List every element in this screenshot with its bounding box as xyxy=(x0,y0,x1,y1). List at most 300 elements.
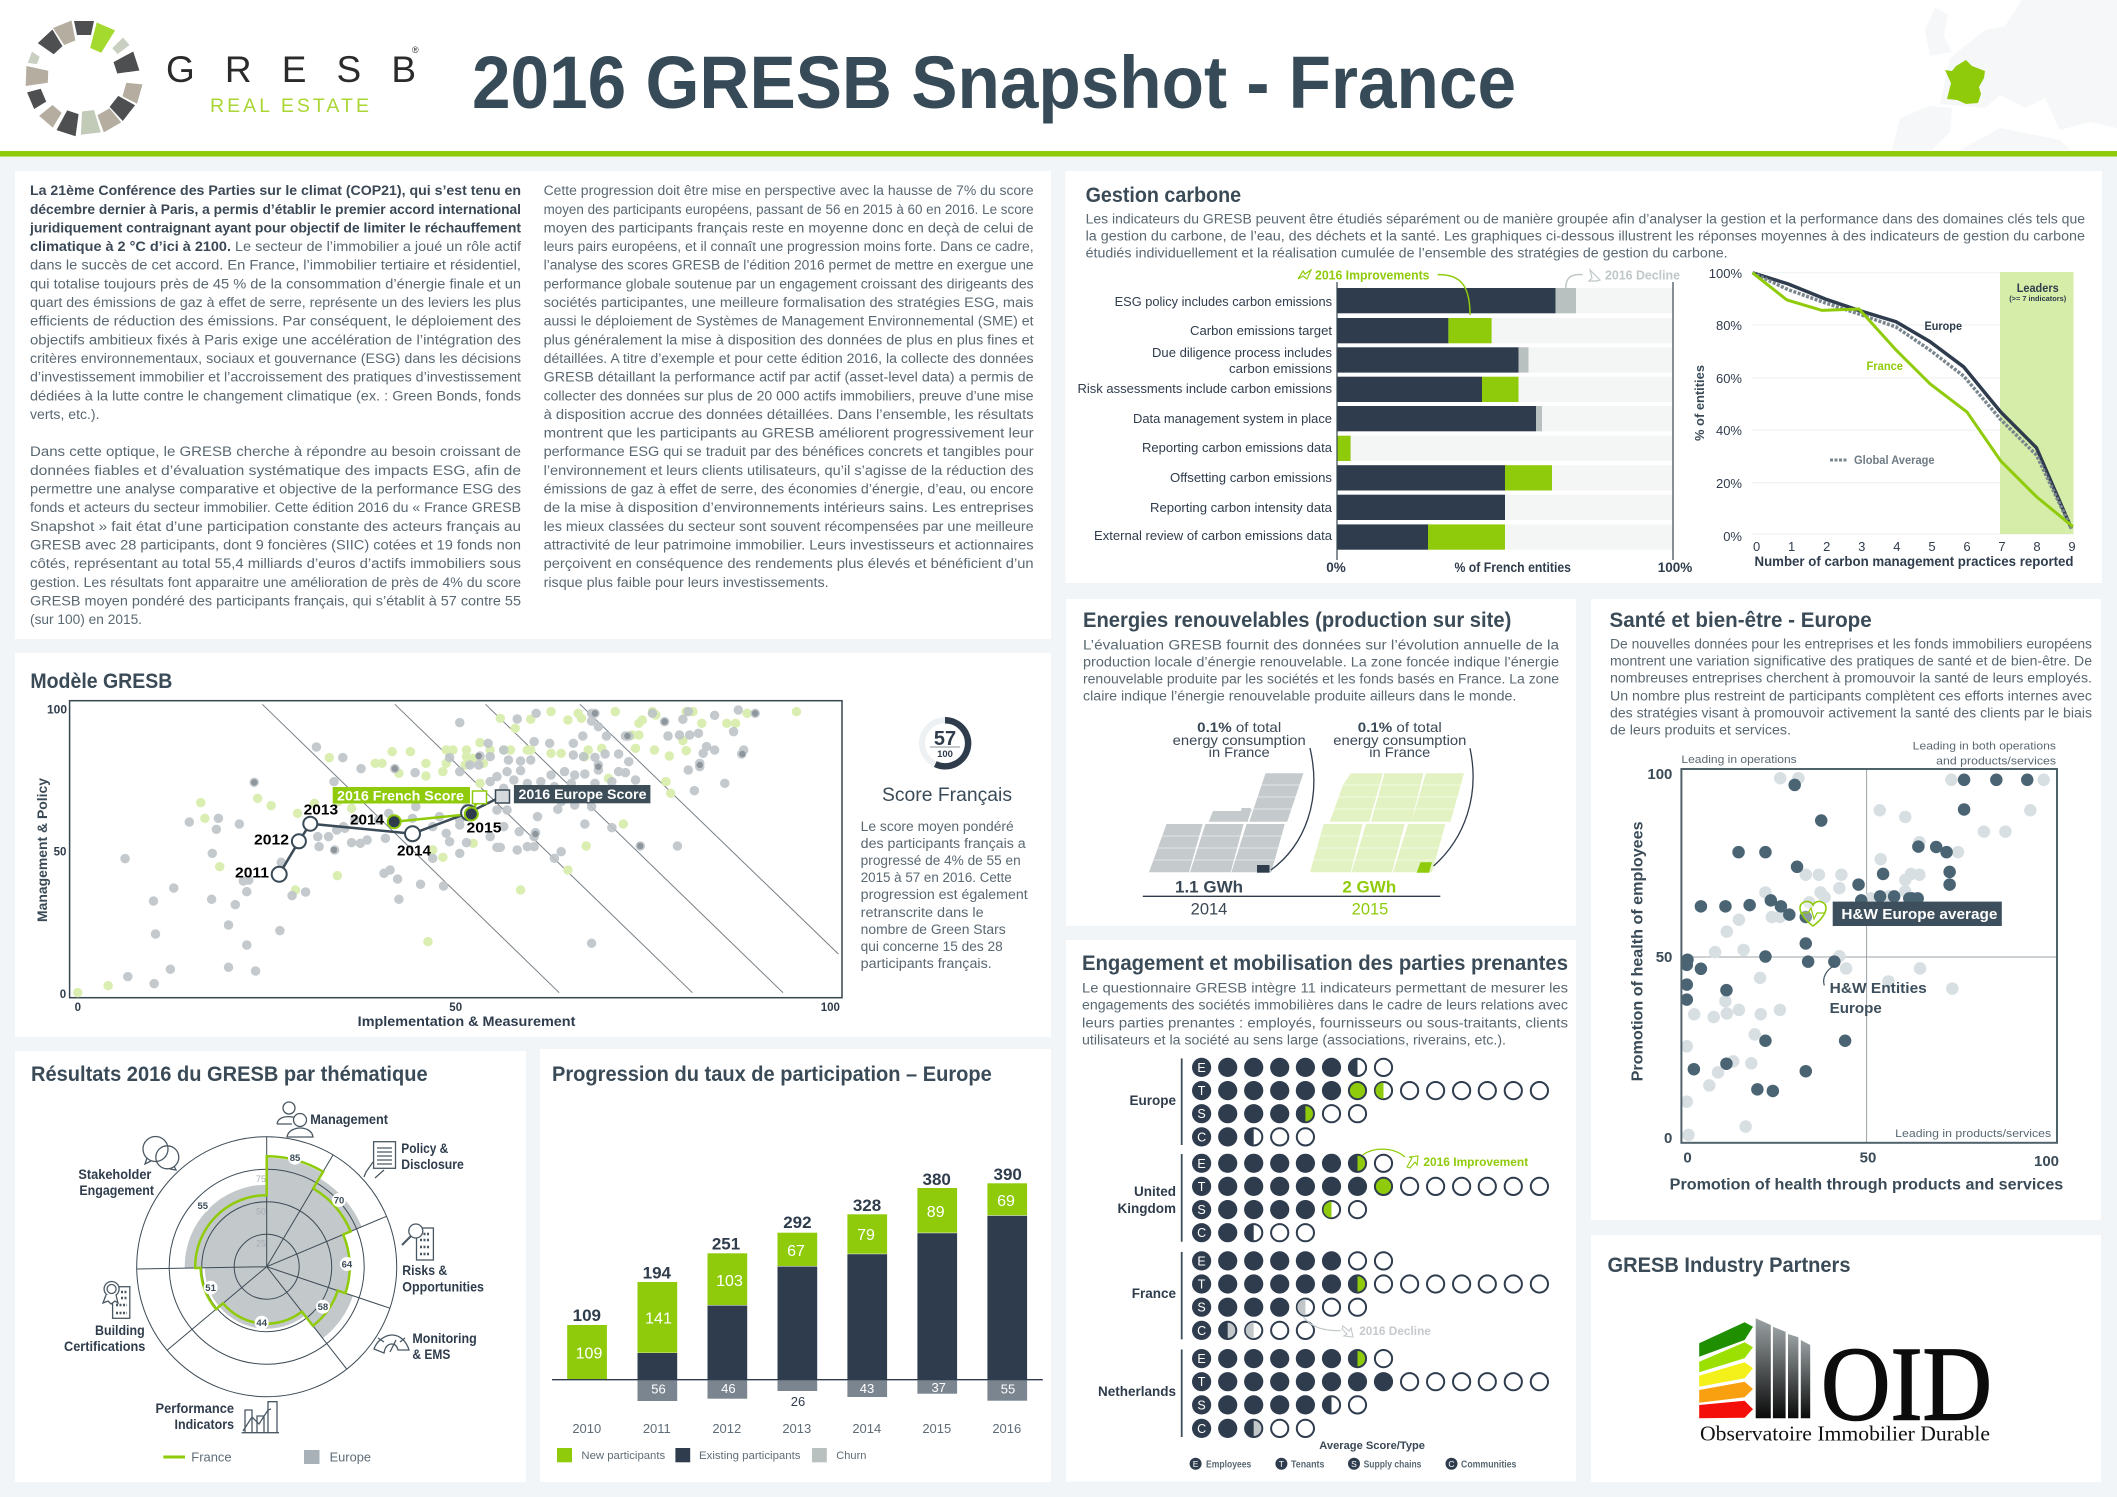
icon: stakeholder speech bubbles xyxy=(143,1136,179,1170)
y ticks xyxy=(1647,766,1672,1147)
dot matrix: Europe xyxy=(1129,1058,1548,1146)
text block: claire indique l’énergie renouvelable produite ailleurs dans le monde. xyxy=(1083,688,1516,704)
legend: average score type: C xyxy=(1448,1459,1455,1469)
text block: right column: moyen des participants français reste en moyenne donc en deçà de celui de xyxy=(544,220,1034,235)
text block: left column: permettre une analyse comparative et objective de la performance ESG des xyxy=(30,482,521,496)
heading: Résultats 2016 du GRESB par thématique xyxy=(31,1063,428,1086)
y tick labels: 100% xyxy=(1709,266,1742,281)
x tick labels: 9 xyxy=(2068,539,2076,554)
text block: left column: critères environnementaux, sociaux et gouvernance (ESG) dans les décisions xyxy=(30,351,521,366)
caption: 2015 share: in France xyxy=(1369,744,1431,760)
text block: right column: Cette progression doit être mise en perspective avec la hausse de 7% du score xyxy=(544,183,1034,198)
y tick labels: 0% xyxy=(1723,529,1742,544)
axis labels: Risks & xyxy=(402,1263,448,1278)
label: Leaders: Leaders xyxy=(2017,281,2059,295)
text block: Un nombre plus restreint de participants complètent ces efforts internes avec xyxy=(1610,688,2092,704)
churn values: 37 xyxy=(931,1380,946,1395)
line: Europe xyxy=(1752,273,2072,529)
x axis title: Number of carbon management practices reported xyxy=(1754,554,2074,569)
x axis title: Promotion of health through products and services xyxy=(1670,1176,2063,1194)
ring scale labels: 75 xyxy=(256,1174,266,1184)
totals: 194 xyxy=(643,1263,672,1282)
text block: right column: l’environnement et leurs clients utilisateurs, qu’il s’agisse de la réduction des xyxy=(544,463,1034,478)
callout: 2016 Decline: 2016 Decline xyxy=(1605,268,1680,282)
label: H&W Entities Europe xyxy=(1824,966,1927,1017)
text block: left column: quart des émissions de gaz à effet de serre, représente un des leviers les plus xyxy=(30,295,521,310)
y tick labels: 60% xyxy=(1716,371,1742,386)
text block: left column: décembre dernier à Paris, a permis d’établir le premier accord international xyxy=(30,202,521,217)
x tick labels: 0 xyxy=(1753,539,1760,554)
line: Global average xyxy=(1752,273,2072,529)
axis labels: Disclosure xyxy=(401,1157,464,1172)
panel: GRESB Industry Partners xyxy=(1591,1235,2101,1482)
text block: right column: collecter des données sur plus de 20 000 actifs immobiliers, preuve d’une mise xyxy=(544,388,1034,403)
bar labels: Due diligence process includes xyxy=(1152,345,1332,360)
axis labels xyxy=(1326,560,1692,575)
legend: average score type: E xyxy=(1193,1459,1199,1469)
legend: average score type: Average Score/Type xyxy=(1319,1440,1425,1452)
dot matrix: France: T xyxy=(1198,1278,1206,1292)
x tick labels: 8 xyxy=(2033,539,2041,554)
axis labels: Stakeholder xyxy=(78,1167,152,1182)
axis labels: Management xyxy=(310,1112,388,1127)
text block: score explanation: 2015 à 57 en 2016. Cette xyxy=(861,870,1012,885)
y tick labels xyxy=(1709,266,1742,544)
value labels: 1.1 GWh xyxy=(1175,878,1243,896)
header band xyxy=(0,0,2117,156)
caption: 2014 share: in France xyxy=(1209,744,1270,760)
dot matrix: Netherlands: Netherlands xyxy=(1098,1384,1176,1399)
new participant values xyxy=(576,1193,1015,1362)
year labels: 2016 xyxy=(992,1421,1021,1436)
axis labels: & EMS xyxy=(412,1347,450,1362)
x ticks xyxy=(75,1002,840,1014)
text block: left column xyxy=(29,183,522,627)
bar labels: Carbon emissions target xyxy=(1190,323,1332,338)
y ticks: 50 xyxy=(54,846,66,858)
text block: score explanation: Le score moyen pondéré xyxy=(861,819,1014,834)
leaders band xyxy=(2000,272,2074,534)
panel: Santé et bien-être xyxy=(1591,599,2101,1220)
text block: left column: données fiables et d’évaluation systématique des impacts ESG, afin de xyxy=(30,463,521,478)
text block: score explanation: progression est également xyxy=(861,887,1028,902)
bar labels: ESG policy includes carbon emissions xyxy=(1115,294,1332,309)
callout: 2016 Improvements xyxy=(1298,268,1470,315)
new participant values: 109 xyxy=(576,1346,602,1362)
text block xyxy=(1082,980,1568,1048)
totals: 380 xyxy=(923,1170,951,1189)
text block: score explanation: participants français. xyxy=(861,956,992,971)
panel: Progression du taux de participation xyxy=(540,1049,1051,1482)
heading: Santé et bien-être - Europe xyxy=(1610,609,1872,632)
text block: renouvelable produite par les sociétés et les fonds basés en France. La zone xyxy=(1083,672,1559,686)
axis labels: 100% xyxy=(1658,560,1692,575)
icon: solar panels 2015 xyxy=(1305,748,1473,873)
bar labels: carbon emissions xyxy=(1229,361,1333,376)
x tick labels xyxy=(1753,539,2076,554)
dot matrix: Europe: S xyxy=(1197,1107,1206,1121)
year labels: 2015 xyxy=(466,820,502,836)
totals: 292 xyxy=(783,1213,812,1232)
line: French score trajectory xyxy=(394,797,479,822)
dot matrix: France: S xyxy=(1197,1301,1206,1315)
y ticks: 100 xyxy=(1647,766,1672,783)
x tick labels: 5 xyxy=(1928,539,1936,554)
year labels: 2013 xyxy=(304,802,338,818)
legend: average score type: Tenants xyxy=(1291,1458,1325,1470)
dot matrix: United Kingdom xyxy=(1118,1154,1548,1242)
text block: score explanation: des participants français a xyxy=(861,836,1026,851)
axis labels: Monitoring xyxy=(412,1331,477,1346)
text block: right column: émissions de gaz à effet de serre, des économies d’énergie, d’eau, ou encore xyxy=(544,482,1034,496)
y ticks: 0 xyxy=(1664,1130,1672,1147)
text block: left column: objectifs ambitieux fixés à Paris exige une accélération de l’intégration des xyxy=(30,332,521,347)
year labels: 2013 xyxy=(782,1421,811,1436)
new participant values: 89 xyxy=(927,1204,945,1221)
value labels: 2 GWh xyxy=(1342,878,1396,896)
text block: right column: aussi le déploiement de Systèmes de Management Environnemental (SME) et xyxy=(544,314,1034,329)
donut: score 57/100: 100 xyxy=(937,749,953,760)
y axis title: Management & Policy xyxy=(35,778,50,922)
line: France xyxy=(1752,273,2073,527)
dot matrix: Netherlands: E xyxy=(1197,1352,1206,1366)
bar labels: Risk assessments include carbon emissions xyxy=(1078,381,1332,396)
totals: 328 xyxy=(853,1196,881,1215)
value labels: 2015 xyxy=(1352,900,1388,918)
label: Leaders: (>= 7 indicators) xyxy=(2009,294,2067,303)
bar labels xyxy=(1078,294,1333,543)
label: France: France xyxy=(1866,359,1903,373)
churn values: 55 xyxy=(1001,1382,1015,1396)
label: H&W Europe average xyxy=(1833,902,2002,926)
legend: Europe xyxy=(330,1450,371,1464)
totals: 390 xyxy=(994,1165,1022,1184)
text block: left column: Dans cette optique, le GRESB cherche à répondre au besoin croissant de xyxy=(30,444,521,459)
callout: 2016 Improvement xyxy=(1363,1149,1528,1169)
y tick labels: 40% xyxy=(1716,423,1742,438)
text block: Les indicateurs du GRESB peuvent être étudiés séparément ou de manière groupée afin d’analyser la gestion et la performance dans des domaines clés tels que xyxy=(1086,212,2085,226)
axis labels: Building xyxy=(95,1323,145,1338)
dot matrix: France: C xyxy=(1197,1324,1206,1338)
text block: left column: climatique à 2 °C d’ici à 2100. Le secteur de l’immobilier a joué un rôle actif xyxy=(30,239,521,254)
icon: risks magnifier and building xyxy=(402,1224,433,1260)
label: H&W Europe average: H&W Europe average xyxy=(1841,906,1997,923)
text block xyxy=(1086,212,2085,260)
text block: left column: (sur 100) en 2015. xyxy=(30,612,142,627)
label: 2016 French Score: 2016 French Score xyxy=(337,788,464,804)
x ticks xyxy=(1683,1150,2059,1170)
caption: 2014 share: energy consumption xyxy=(1173,732,1306,748)
x tick labels: 3 xyxy=(1858,539,1865,554)
label: Global Average: Global Average xyxy=(1854,455,1935,467)
text block: Le questionnaire GRESB intègre 11 indicateurs permettant de mesurer les xyxy=(1082,980,1568,996)
x tick labels: 2 xyxy=(1823,539,1830,554)
text block: right column: performance ESG qui se traduit par des bénéfices concrets et tangibles pour xyxy=(544,444,1034,459)
text block: right column: à disposition accrue des données détaillées. Dans l’ensemble, les résultats xyxy=(544,407,1034,422)
icon: heart with pulse xyxy=(1800,901,1826,926)
dot matrix: Netherlands: T xyxy=(1198,1375,1206,1389)
logo: OID xyxy=(1699,1318,1992,1446)
text block xyxy=(1083,638,1560,704)
bar labels: Data management system in place xyxy=(1133,411,1332,426)
legend: average score type: S xyxy=(1351,1459,1357,1469)
text block: left column: verts, etc.). xyxy=(30,407,100,422)
label: 2016 Europe Score: 2016 Europe Score xyxy=(518,786,647,802)
scatter chart: GRESB model xyxy=(35,701,842,1029)
heading: Engagement et mobilisation des parties prenantes xyxy=(1082,952,1568,975)
new participant values: 103 xyxy=(716,1273,743,1290)
scatter chart: health and well-being xyxy=(1630,766,2063,1194)
axis labels: Opportunities xyxy=(402,1280,484,1294)
text block: montrent une variation significative des pratiques de santé et de bien-être. De xyxy=(1610,654,2092,668)
panel: Energies renouvelables xyxy=(1066,599,1576,926)
heading: Energies renouvelables (production sur site) xyxy=(1083,609,1511,632)
text block: right column: les mieux classées du secteur sont souvent récompensées par une meilleure xyxy=(544,519,1034,534)
dot matrix: France: France xyxy=(1132,1286,1176,1301)
legend: average score type: Employees xyxy=(1206,1458,1251,1470)
value labels: 58 xyxy=(318,1302,328,1313)
axis labels: Engagement xyxy=(79,1183,154,1198)
text block: left column: La 21ème Conférence des Parties sur le climat (COP21), qui s’est tenu en xyxy=(30,183,521,198)
y ticks: 100 xyxy=(47,704,67,716)
callout: 2016 Decline xyxy=(1303,1317,1431,1338)
ring scale labels: 25 xyxy=(256,1238,266,1248)
bar labels: Reporting carbon intensity data xyxy=(1150,500,1333,515)
callout: 2016 Improvements: 2016 Improvements xyxy=(1315,268,1430,282)
text block: score explanation xyxy=(861,819,1028,971)
quadrant labels xyxy=(1681,740,2057,1140)
totals: 251 xyxy=(712,1234,740,1253)
line chart: number of carbon practices xyxy=(1693,266,2076,569)
dot matrix: United Kingdom: United xyxy=(1134,1184,1176,1199)
value labels xyxy=(1143,878,1440,918)
text block: left column: juridiquement contraignant ayant pour objectif de limiter le réchauffement xyxy=(29,220,522,235)
new participant values: 79 xyxy=(857,1227,875,1244)
text block: left column: GRESB avec 28 participants, dont 9 foncières (SIIC) cotées et 19 fonds non xyxy=(30,537,521,552)
logo: OID: OID xyxy=(1821,1326,1992,1442)
y ticks xyxy=(47,704,67,1001)
logo wordmark: ® xyxy=(412,45,419,55)
text block: left column: GRESB moyen pondéré des participants français, qui s’établit à 57 contre 55 xyxy=(30,593,521,608)
text block: right column: perçoivent en conséquence des rendements plus élevés et bénéficient d’un xyxy=(544,556,1034,571)
axis labels: Indicators xyxy=(174,1417,234,1432)
dot matrix: United Kingdom: S xyxy=(1197,1203,1206,1217)
value labels: 64 xyxy=(342,1259,353,1270)
dot matrix: United Kingdom: Kingdom xyxy=(1118,1201,1176,1216)
data points xyxy=(272,805,478,882)
bar chart: participants per year xyxy=(552,1165,1043,1436)
text block xyxy=(1610,636,2092,738)
x ticks: 100 xyxy=(821,1002,840,1014)
legend: average score type: Supply chains xyxy=(1364,1458,1422,1470)
bar labels: External review of carbon emissions data xyxy=(1094,528,1333,543)
year labels: 2015 xyxy=(922,1421,951,1436)
churn values: 56 xyxy=(651,1382,666,1396)
heading: Progression du taux de participation – Europe xyxy=(552,1063,992,1086)
text block: left column: dédiées à la lutte contre le changement climatique (ex. : Green Bonds, fonds xyxy=(30,388,521,403)
dot matrix: United Kingdom: T xyxy=(1198,1180,1206,1194)
value labels: 51 xyxy=(205,1283,217,1294)
year labels: 2011 xyxy=(643,1421,671,1436)
text block: De nouvelles données pour les entreprises et les fonds immobiliers européens xyxy=(1610,636,2092,652)
panel: Gestion carbone xyxy=(1066,171,2102,583)
year labels: 2014 xyxy=(397,842,432,860)
text block: left column: d’investissement immobilier et l’accroissement des pratiques d’investissement xyxy=(30,370,521,385)
y ticks: 50 xyxy=(1656,949,1672,966)
icon: policy document xyxy=(364,1142,396,1178)
ring scale labels: 50 xyxy=(256,1206,266,1216)
dot matrix: Europe: T xyxy=(1198,1084,1206,1098)
value labels: 70 xyxy=(334,1195,344,1206)
text block: left column: dans le succès de cet accord. En France, l’immobilier tertiaire et résidentiel, xyxy=(30,258,521,273)
dot matrix: United Kingdom: C xyxy=(1197,1226,1206,1240)
quadrant labels: Leading in products/services xyxy=(1895,1128,2052,1140)
text block: right column: GRESB détaillant la performance actif par actif (asset-level data) a permis de xyxy=(544,370,1034,385)
value labels: 85 xyxy=(290,1153,301,1164)
label: H&W Entities Europe: H&W Entities xyxy=(1830,980,1927,997)
x ticks: 0 xyxy=(75,1002,81,1014)
panel: Engagement et mobilisation xyxy=(1066,940,1576,1482)
quadrant labels: and products/services xyxy=(1936,756,2057,768)
text block: right column: sociétés participantes, une meilleure formalisation des stratégies ESG, mais xyxy=(544,295,1034,310)
bar chart: carbon indicators xyxy=(1078,268,1692,575)
heading: Modèle GRESB xyxy=(30,670,172,693)
panel: introduction text xyxy=(15,171,1051,639)
label: Leaders xyxy=(2009,281,2067,303)
panel: Modèle GRESB xyxy=(15,653,1051,1037)
text block: right column: moyen des participants européens, passant de 56 en 2015 à 60 en 2016. Le score xyxy=(544,202,1034,217)
quadrant labels: Leading in both operations xyxy=(1913,740,2057,752)
logo wordmark xyxy=(166,45,419,117)
Europe area xyxy=(185,1158,362,1338)
y axis title: % of entities xyxy=(1693,365,1707,441)
text block: right column: plus généralement la mise à disposition des données de plus en plus fines et xyxy=(544,332,1034,347)
text block: right column: montrent que les participants au GRESB améliorent progressivement leur xyxy=(544,426,1034,441)
text block: score explanation: nombre de Green Stars xyxy=(861,922,1006,937)
donut: score 57/100: 57 xyxy=(934,728,956,750)
axis labels: Policy & xyxy=(401,1141,449,1156)
legend xyxy=(163,1450,371,1464)
text block: left column: fonds et acteurs du secteur immobilier. Cette édition 2016 du « France GRESB xyxy=(30,500,521,515)
legend: average score type: T xyxy=(1279,1459,1284,1469)
year labels: 2011 xyxy=(235,864,269,882)
caption: 2014 share: 0.1% of total xyxy=(1197,719,1281,735)
text block: left column: qui totalise toujours près de 45 % de la consommation d’énergie finale et un xyxy=(30,276,521,291)
bar labels: Reporting carbon emissions data xyxy=(1142,440,1333,455)
legend: average score type: Communities xyxy=(1461,1458,1517,1470)
text block: left column: côtés, représentant au total 55,4 milliards d’euros d’actifs immobiliers sous xyxy=(30,556,521,571)
ring scale labels xyxy=(256,1174,266,1248)
text block: right column: l’analyse des scores GRESB de l’édition 2016 permet de mettre en exergue une xyxy=(544,258,1034,273)
axis labels: Performance xyxy=(156,1401,234,1416)
x tick labels: 6 xyxy=(1963,539,1971,554)
value labels: 55 xyxy=(198,1201,209,1212)
text block: right column: attractivité de leur patrimoine immobilier. Leurs investisseurs et actionnaires xyxy=(544,537,1034,552)
churn values: 46 xyxy=(721,1381,736,1396)
dot matrix: France xyxy=(1132,1251,1548,1340)
new participant values: 141 xyxy=(645,1310,672,1328)
bar labels: Offsetting carbon emissions xyxy=(1170,470,1333,485)
new participant values: 67 xyxy=(787,1243,805,1260)
France outline xyxy=(195,1156,351,1326)
icon: France highlighted on map xyxy=(1945,60,1985,104)
icon: solar panels 2014 xyxy=(1145,748,1314,873)
churn values: 43 xyxy=(860,1381,874,1396)
donut: score 57/100 xyxy=(922,720,968,766)
x ticks: 50 xyxy=(1860,1150,1876,1166)
icon: building certification xyxy=(103,1282,130,1318)
x tick labels: 1 xyxy=(1788,539,1795,554)
churn values xyxy=(651,1380,1015,1409)
value labels: 44 xyxy=(256,1318,268,1329)
text block: right column: leurs pairs européens, et il connaît une progression moins forte. Dans ce cadre, xyxy=(544,239,1034,254)
legend: France xyxy=(191,1450,232,1464)
caption: 2015 share: 0.1% of total xyxy=(1358,719,1442,735)
year labels: 2012 xyxy=(254,832,289,848)
quadrant labels: Leading in operations xyxy=(1681,754,1797,766)
callout: 2016 Decline xyxy=(1566,268,1680,288)
background map of Europe xyxy=(1892,0,2117,150)
value labels xyxy=(196,1151,354,1330)
year labels xyxy=(572,1421,1021,1436)
text block: la gestion du carbone, de l’eau, des déchets et la santé. Les graphiques ci-dessous illustrent les réponses moyennes à des indicateurs de gestion du carbone xyxy=(1086,228,2085,244)
x ticks: 0 xyxy=(1683,1150,1692,1166)
year labels: 2014 xyxy=(350,812,385,828)
heading: Gestion carbone xyxy=(1086,184,1241,207)
text block: score explanation: retranscrite dans le xyxy=(861,905,984,920)
text block: score explanation: progressé de 4% de 55 en xyxy=(861,853,1021,868)
axis labels xyxy=(64,1112,484,1432)
heading: GRESB Industry Partners xyxy=(1608,1254,1850,1277)
y axis title: Promotion of health of employees xyxy=(1630,821,1646,1081)
title: 2016 GRESB Snapshot - France xyxy=(472,41,1516,124)
year labels: 2012 xyxy=(712,1421,741,1436)
text block: score explanation: qui concerne 15 des 28 xyxy=(861,939,1003,954)
dot matrix: Netherlands: S xyxy=(1197,1398,1206,1412)
x ticks: 100 xyxy=(2034,1153,2059,1170)
logo: OID: Observatoire Immobilier Durable xyxy=(1700,1422,1990,1446)
x ticks: 50 xyxy=(449,1002,462,1014)
x tick labels: 7 xyxy=(1998,539,2006,554)
year labels: 2010 xyxy=(572,1421,601,1436)
y tick labels: 20% xyxy=(1716,476,1742,491)
new participant values: 69 xyxy=(997,1193,1015,1210)
dot matrix: Europe: Europe xyxy=(1129,1093,1176,1108)
text block: nombreuses entreprises cherchent à promouvoir la santé de leurs employés. xyxy=(1610,670,2092,686)
logo wordmark: GRESB xyxy=(166,49,416,90)
year labels: 2014 xyxy=(852,1421,881,1436)
caption: 2014 share xyxy=(1173,719,1306,760)
axis labels: 0% xyxy=(1326,560,1346,575)
panel: Résultats par thématique xyxy=(15,1051,526,1482)
green header rule xyxy=(0,151,2117,156)
label: H&W Entities Europe: Europe xyxy=(1830,1000,1882,1017)
text block: right column: de la mise à disposition d’environnements intérieurs sains. Les entreprises xyxy=(544,500,1034,515)
totals: 109 xyxy=(573,1306,601,1325)
text block: left column: gestion. Les résultats font apparaitre une amélioration de près de 4% du score xyxy=(30,575,521,590)
text block: right column: risque plus faible pour leurs investissements. xyxy=(544,575,829,590)
polar chart xyxy=(137,1137,397,1397)
year labels xyxy=(235,802,502,882)
icon: performance indicators xyxy=(242,1402,279,1433)
axis labels: % of French entities xyxy=(1454,560,1571,575)
legend: Churn xyxy=(836,1450,866,1462)
text block: L’évaluation GRESB fournit des données sur l’évolution annuelle de la xyxy=(1083,638,1560,652)
totals xyxy=(573,1165,1022,1325)
text block: left column: Snapshot » fait état d’une participation constante des acteurs français au xyxy=(30,519,521,534)
callout: 2016 Decline: 2016 Decline xyxy=(1359,1324,1431,1338)
y tick labels: 80% xyxy=(1716,318,1742,333)
